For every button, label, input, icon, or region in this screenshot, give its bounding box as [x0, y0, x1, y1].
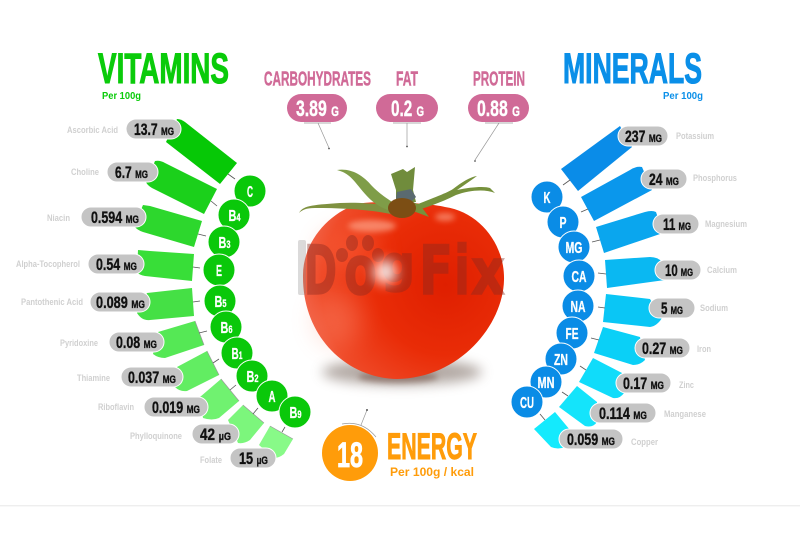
tomato body: [303, 202, 504, 379]
mineral CA: calcium: Calcium: [707, 265, 737, 275]
carbohydrates callout: [264, 68, 371, 149]
mineral MN: manganese: Manganese: [664, 409, 706, 419]
minerals heading: MINERALS: [563, 45, 702, 93]
mineral K: potassium: Potassium: [676, 131, 714, 141]
protein callout: 0.88 G: [477, 96, 520, 121]
macronutrients panel: [264, 68, 529, 162]
vitamin B6: pyridoxine: [60, 311, 242, 358]
vitamin C: ascorbic acid: 13.7 MG: [134, 121, 174, 139]
vitamin C: ascorbic acid: Ascorbic Acid: [67, 125, 118, 135]
vitamin B5: pantothenic acid: [21, 285, 236, 320]
watermark: DogFix: [298, 232, 505, 311]
mineral P: phosphorus: [547, 167, 737, 238]
vitamin B1: thiamine: [77, 337, 253, 391]
energy block: Per 100g / kcal: [390, 465, 474, 479]
mineral K: potassium: [531, 126, 714, 213]
mineral K: potassium: K: [544, 190, 551, 207]
panel: vitamins: [16, 119, 311, 468]
watermark: DogFix: o: [344, 232, 377, 311]
vitamin B3: niacin: 0.594 MG: [91, 209, 139, 227]
mineral MN: manganese: MN: [538, 375, 554, 392]
vitamin B4: choline: B4: [228, 208, 241, 225]
vitamins heading: VITAMINS: [98, 45, 229, 93]
vitamin B1: thiamine: 0.037 MG: [128, 369, 176, 387]
vitamin A: phylloquinone: Phylloquinone: [130, 431, 182, 441]
protein callout: PROTEIN: [473, 68, 525, 90]
footer divider: [0, 505, 800, 506]
vitamin B1: thiamine: Thiamine: [77, 373, 110, 383]
vitamin B9: folate: [200, 396, 311, 468]
carbohydrates callout: 3.89 G: [296, 96, 339, 121]
mineral CU: copper: 0.059 MG: [567, 431, 615, 449]
watermark: DogFix: x: [471, 236, 505, 310]
mineral ZN: zinc: ZN: [554, 352, 568, 369]
watermark: DogFix: D: [304, 232, 337, 311]
vitamins heading: Per 100g: [102, 90, 141, 102]
panel: minerals: [511, 126, 747, 449]
mineral FE: iron: Iron: [697, 344, 711, 354]
mineral MG: magnesium: 11 MG: [663, 216, 691, 234]
vitamin C: ascorbic acid: [67, 119, 266, 207]
mineral P: phosphorus: 24 MG: [649, 171, 679, 189]
vitamin B4: choline: [71, 161, 250, 231]
mineral MG: magnesium: MG: [566, 240, 582, 257]
vitamin E: alpha-tocopherol: E: [216, 263, 222, 280]
energy block: 18: [337, 436, 363, 475]
mineral MN: manganese: 0.114 MG: [599, 405, 647, 423]
mineral ZN: zinc: 0.17 MG: [623, 375, 664, 393]
energy block: ENERGY: [387, 426, 477, 467]
mineral MG: magnesium: [558, 211, 747, 263]
vitamin B4: choline: Choline: [71, 167, 99, 177]
minerals heading: [563, 45, 703, 102]
fat callout: FAT: [396, 68, 418, 90]
mineral FE: iron: FE: [566, 326, 579, 343]
vitamin B9: folate: Folate: [200, 455, 222, 465]
tomato shadow: [322, 359, 482, 385]
mineral ZN: zinc: [545, 343, 694, 398]
tomato illustration: [299, 167, 504, 385]
vitamin A: phylloquinone: [130, 380, 288, 444]
vitamin B1: thiamine: B1: [232, 346, 242, 363]
mineral CU: copper: [511, 386, 658, 449]
vitamin B9: folate: 15 µG: [239, 450, 268, 468]
mineral P: phosphorus: Phosphorus: [693, 173, 737, 183]
vitamin A: phylloquinone: 42 µG: [200, 426, 231, 444]
tomato glare: [373, 260, 397, 284]
vitamin B6: pyridoxine: 0.08 MG: [116, 334, 157, 352]
mineral NA: sodium: [562, 290, 728, 327]
mineral MN: manganese: [530, 366, 706, 426]
vitamin B6: pyridoxine: B6: [220, 320, 232, 337]
icon: paw print: [336, 235, 384, 262]
vitamins heading: [98, 45, 229, 102]
mineral FE: iron: [556, 317, 711, 365]
watermark: DogFix: F: [419, 232, 453, 311]
vitamin B5: pantothenic acid: Pantothenic Acid: [21, 297, 83, 307]
mineral CA: calcium: [563, 257, 737, 292]
watermark: DogFix: g: [381, 235, 415, 293]
fat callout: [376, 68, 438, 147]
vitamin E: alpha-tocopherol: 0.54 MG: [96, 256, 137, 274]
mineral FE: iron: 0.27 MG: [642, 340, 683, 358]
vitamin A: phylloquinone: A: [268, 389, 276, 406]
mineral CU: copper: CU: [520, 395, 534, 412]
energy block: [322, 409, 477, 481]
mineral NA: sodium: NA: [570, 299, 586, 316]
vitamin B9: folate: B9: [290, 405, 302, 422]
mineral CU: copper: Copper: [631, 437, 658, 447]
mineral NA: sodium: 5 MG: [661, 300, 683, 318]
mineral CA: calcium: CA: [572, 269, 587, 286]
minerals heading: Per 100g: [663, 90, 703, 102]
carbohydrates callout: CARBOHYDRATES: [264, 68, 371, 90]
vitamin B2: riboflavin: [98, 360, 268, 420]
mineral P: phosphorus: P: [560, 215, 567, 232]
vitamin B2: riboflavin: Riboflavin: [98, 402, 134, 412]
mineral K: potassium: 237 MG: [625, 128, 662, 146]
mineral CA: calcium: 10 MG: [665, 262, 693, 280]
mineral NA: sodium: Sodium: [700, 303, 728, 313]
vitamin E: alpha-tocopherol: Alpha-Tocopherol: [16, 259, 80, 269]
fat callout: 0.2 G: [391, 96, 424, 121]
vitamin B2: riboflavin: 0.019 MG: [152, 399, 200, 417]
vitamin B2: riboflavin: B2: [246, 369, 258, 386]
vitamin B3: niacin: [47, 205, 240, 258]
vitamin B5: pantothenic acid: B5: [214, 294, 226, 311]
vitamin B6: pyridoxine: Pyridoxine: [60, 338, 98, 348]
vitamin B5: pantothenic acid: 0.089 MG: [96, 294, 145, 312]
vitamin B3: niacin: B3: [218, 235, 230, 252]
tomato highlights: [314, 213, 455, 346]
watermark: DogFix: i: [454, 232, 470, 311]
vitamin B4: choline: 6.7 MG: [115, 164, 148, 182]
vitamin B3: niacin: Niacin: [47, 213, 70, 223]
protein callout: [468, 68, 529, 162]
vitamin C: ascorbic acid: C: [247, 184, 253, 201]
stem and sepals: [299, 167, 495, 218]
mineral MG: magnesium: Magnesium: [705, 219, 747, 229]
vitamin E: alpha-tocopherol: [16, 250, 235, 286]
mineral ZN: zinc: Zinc: [679, 380, 694, 390]
